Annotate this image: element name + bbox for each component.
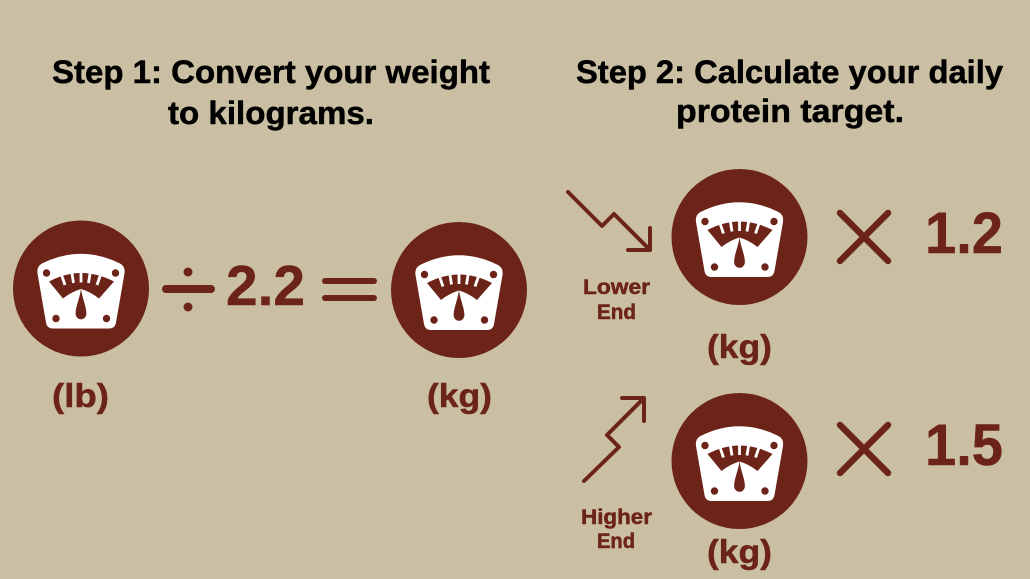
heading: step 1: to kilograms.	[168, 95, 374, 131]
label: higher end: Higher	[581, 506, 652, 529]
label: lower end: End	[597, 301, 636, 324]
icon: scale in kilograms	[391, 222, 527, 358]
icon: divide sign	[162, 268, 215, 312]
heading: step 2: protein target.	[676, 93, 904, 129]
label: higher end	[581, 506, 652, 553]
heading: step 1	[52, 54, 490, 131]
icon: scale in pounds	[13, 220, 149, 356]
icon: scale higher end	[672, 393, 808, 529]
arrow: lower end	[568, 192, 650, 250]
label: kg result: (kg)	[427, 377, 492, 414]
label: kg higher end: (kg)	[707, 533, 772, 570]
number: 2.2: 2.2	[226, 254, 305, 318]
number: 1.2: 1.2	[925, 201, 1003, 266]
label: higher end: End	[597, 530, 635, 553]
heading: step 2: Step 2: Calculate your daily	[576, 54, 1003, 90]
heading: step 2	[576, 54, 1003, 129]
number: 1.5: 1.5	[925, 413, 1003, 478]
arrow: higher end	[584, 398, 644, 481]
icon: scale lower end	[672, 169, 808, 305]
heading: step 1: Step 1: Convert your weight	[52, 54, 490, 90]
icon: equals sign	[322, 278, 377, 301]
icon: multiply lower end	[840, 213, 888, 261]
label: lower end	[583, 276, 650, 324]
label: lower end: Lower	[583, 276, 650, 299]
label: kg lower end: (kg)	[707, 328, 772, 365]
label: lb: (lb)	[52, 377, 109, 414]
icon: multiply higher end	[840, 425, 888, 473]
